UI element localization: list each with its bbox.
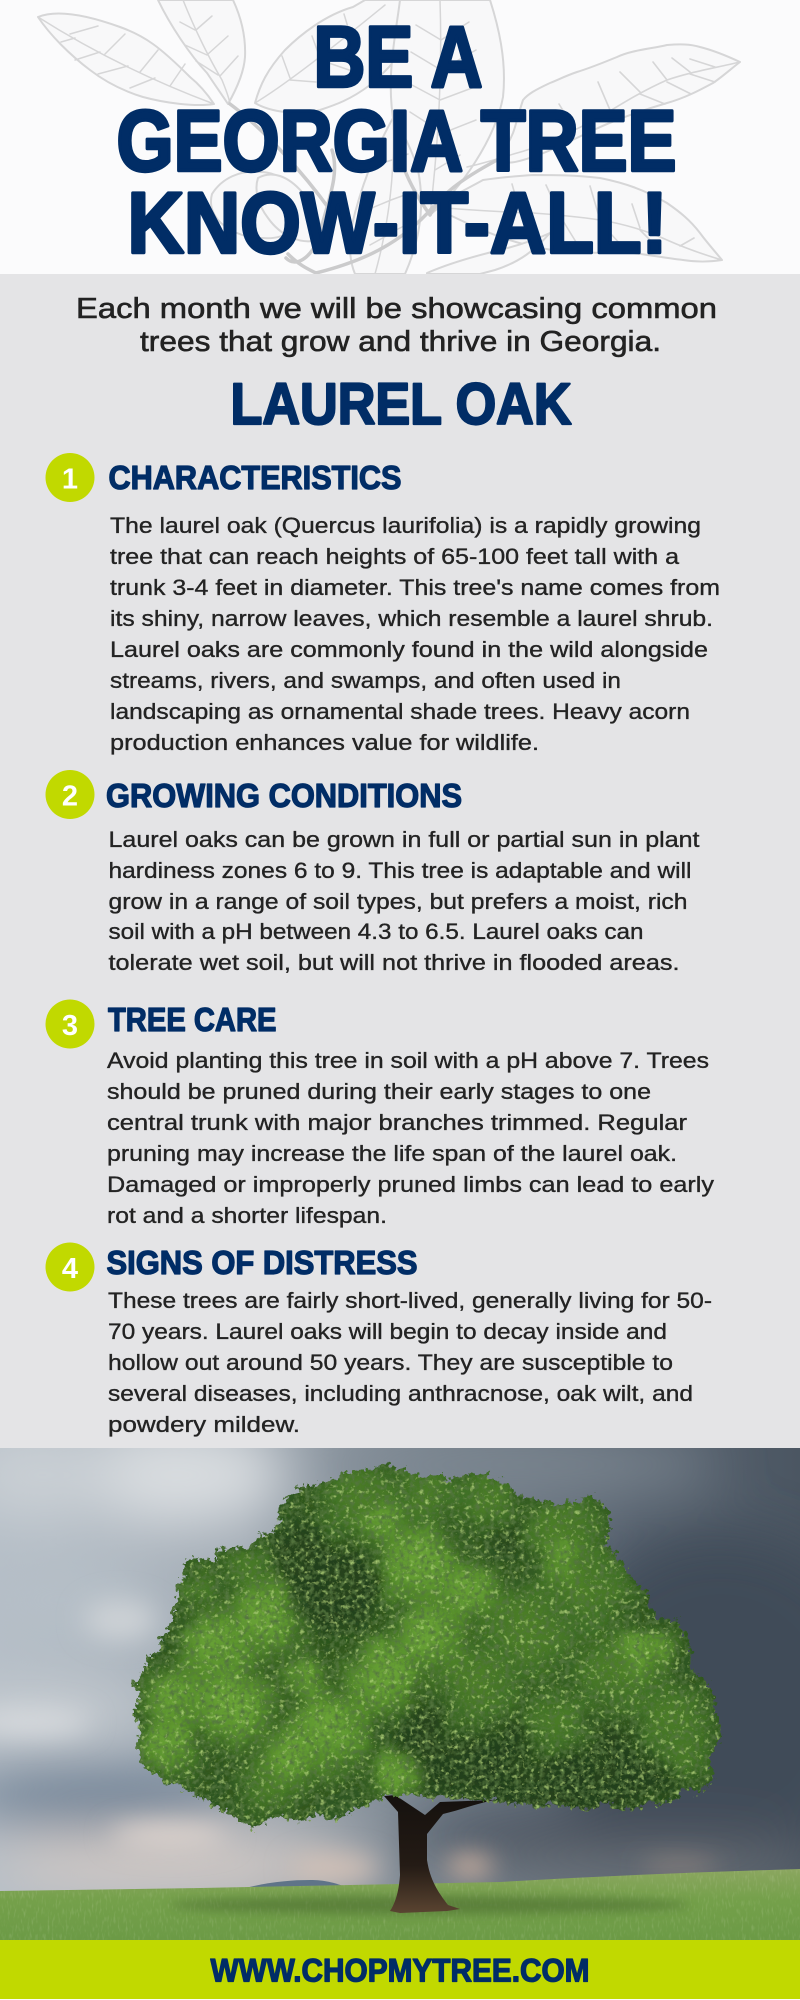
intro text — [76, 293, 717, 358]
section 2: growing conditions — [46, 770, 700, 975]
shaded foliage clumps — [262, 1517, 680, 1811]
intro text: Each month we will be showcasing common — [76, 293, 717, 325]
body: tree care: Damaged or improperly pruned limbs can lead to early — [107, 1172, 714, 1197]
body: signs of distress: powdery mildew. — [108, 1412, 300, 1437]
body: tree care — [107, 1048, 714, 1228]
body: characteristics: production enhances value for wildlife. — [110, 730, 539, 755]
body: tree care: should be pruned during their early stages to one — [107, 1079, 651, 1104]
number badge 2 — [46, 770, 94, 819]
body: characteristics: tree that can reach heights of 65-100 feet tall with a — [110, 544, 680, 569]
body: tree care: rot and a shorter lifespan. — [107, 1203, 387, 1228]
species heading: LAUREL OAK — [230, 372, 572, 437]
body: characteristics: landscaping as ornamental shade trees. Heavy acorn — [110, 699, 690, 724]
heading: signs of distress: SIGNS OF DISTRESS — [106, 1245, 418, 1282]
heading: characteristics: CHARACTERISTICS — [108, 460, 402, 497]
body: growing conditions: grow in a range of soil types, but prefers a moist, rich — [108, 889, 688, 914]
body: signs of distress: These trees are fairly short-lived, generally living for 50- — [108, 1288, 712, 1313]
website address: WWW.CHOPMYTREE.COM — [210, 1952, 590, 1988]
body: growing conditions: tolerate wet soil, but will not thrive in flooded areas. — [108, 950, 680, 975]
body: growing conditions: Laurel oaks can be grown in full or partial sun in plant — [108, 827, 700, 852]
title: KNOW-IT-ALL! — [128, 176, 668, 272]
body: signs of distress: several diseases, including anthracnose, oak wilt, and — [108, 1381, 693, 1406]
body: growing conditions: hardiness zones 6 to 9. This tree is adaptable and will — [108, 858, 692, 883]
body: growing conditions — [108, 827, 700, 975]
body: characteristics: streams, rivers, and swamps, and often used in — [110, 668, 621, 693]
footer bar — [0, 1940, 800, 1999]
illustration: laurel oak leaves — [38, 0, 740, 274]
body: characteristics: its shiny, narrow leaves, which resemble a laurel shrub. — [110, 606, 713, 631]
section 4: signs of distress — [46, 1242, 712, 1437]
number badge 4: 4 — [62, 1253, 78, 1285]
section 3: tree care — [46, 1000, 714, 1228]
title — [116, 10, 676, 272]
photo: oak tree in a field under a stormy sky — [0, 1448, 800, 1940]
section 1: characteristics — [46, 453, 720, 755]
heading: tree care: TREE CARE — [108, 1002, 276, 1039]
sky — [0, 1425, 800, 1940]
tree crown — [135, 1463, 720, 1828]
body: characteristics: trunk 3-4 feet in diameter. This tree's name comes from — [110, 575, 720, 600]
heading: growing conditions: GROWING CONDITIONS — [106, 778, 462, 815]
body: characteristics — [110, 513, 720, 755]
distant hill — [245, 1880, 343, 1888]
title: BE A — [314, 10, 482, 106]
gray content panel — [0, 274, 800, 1448]
body: growing conditions: soil with a pH between 4.3 to 6.5. Laurel oaks can — [108, 919, 644, 944]
number badge 3 — [46, 1000, 94, 1048]
header panel with leaf illustration — [0, 0, 800, 274]
body: tree care: pruning may increase the life span of the laurel oak. — [107, 1141, 677, 1166]
number badge 1: 1 — [62, 464, 78, 496]
body: characteristics: The laurel oak (Quercus laurifolia) is a rapidly growing — [110, 513, 701, 538]
title: GEORGIA TREE — [116, 94, 676, 190]
sunlit foliage clumps — [139, 1503, 669, 1804]
intro text: trees that grow and thrive in Georgia. — [140, 326, 661, 358]
mid-tone foliage clumps — [149, 1463, 716, 1824]
number badge 2: 2 — [62, 780, 78, 812]
tree trunk and branches — [384, 1795, 494, 1913]
body: signs of distress: 70 years. Laurel oaks will begin to decay inside and — [108, 1319, 667, 1344]
body: signs of distress: hollow out around 50 years. They are susceptible to — [108, 1350, 673, 1375]
body: signs of distress — [108, 1288, 712, 1437]
grass field — [0, 1869, 800, 1940]
number badge 3: 3 — [62, 1010, 78, 1042]
body: tree care: Avoid planting this tree in soil with a pH above 7. Trees — [107, 1048, 709, 1073]
body: characteristics: Laurel oaks are commonly found in the wild alongside — [110, 637, 708, 662]
number badge 4 — [46, 1242, 94, 1292]
body: tree care: central trunk with major branches trimmed. Regular — [107, 1110, 687, 1135]
number badge 1 — [46, 453, 94, 502]
